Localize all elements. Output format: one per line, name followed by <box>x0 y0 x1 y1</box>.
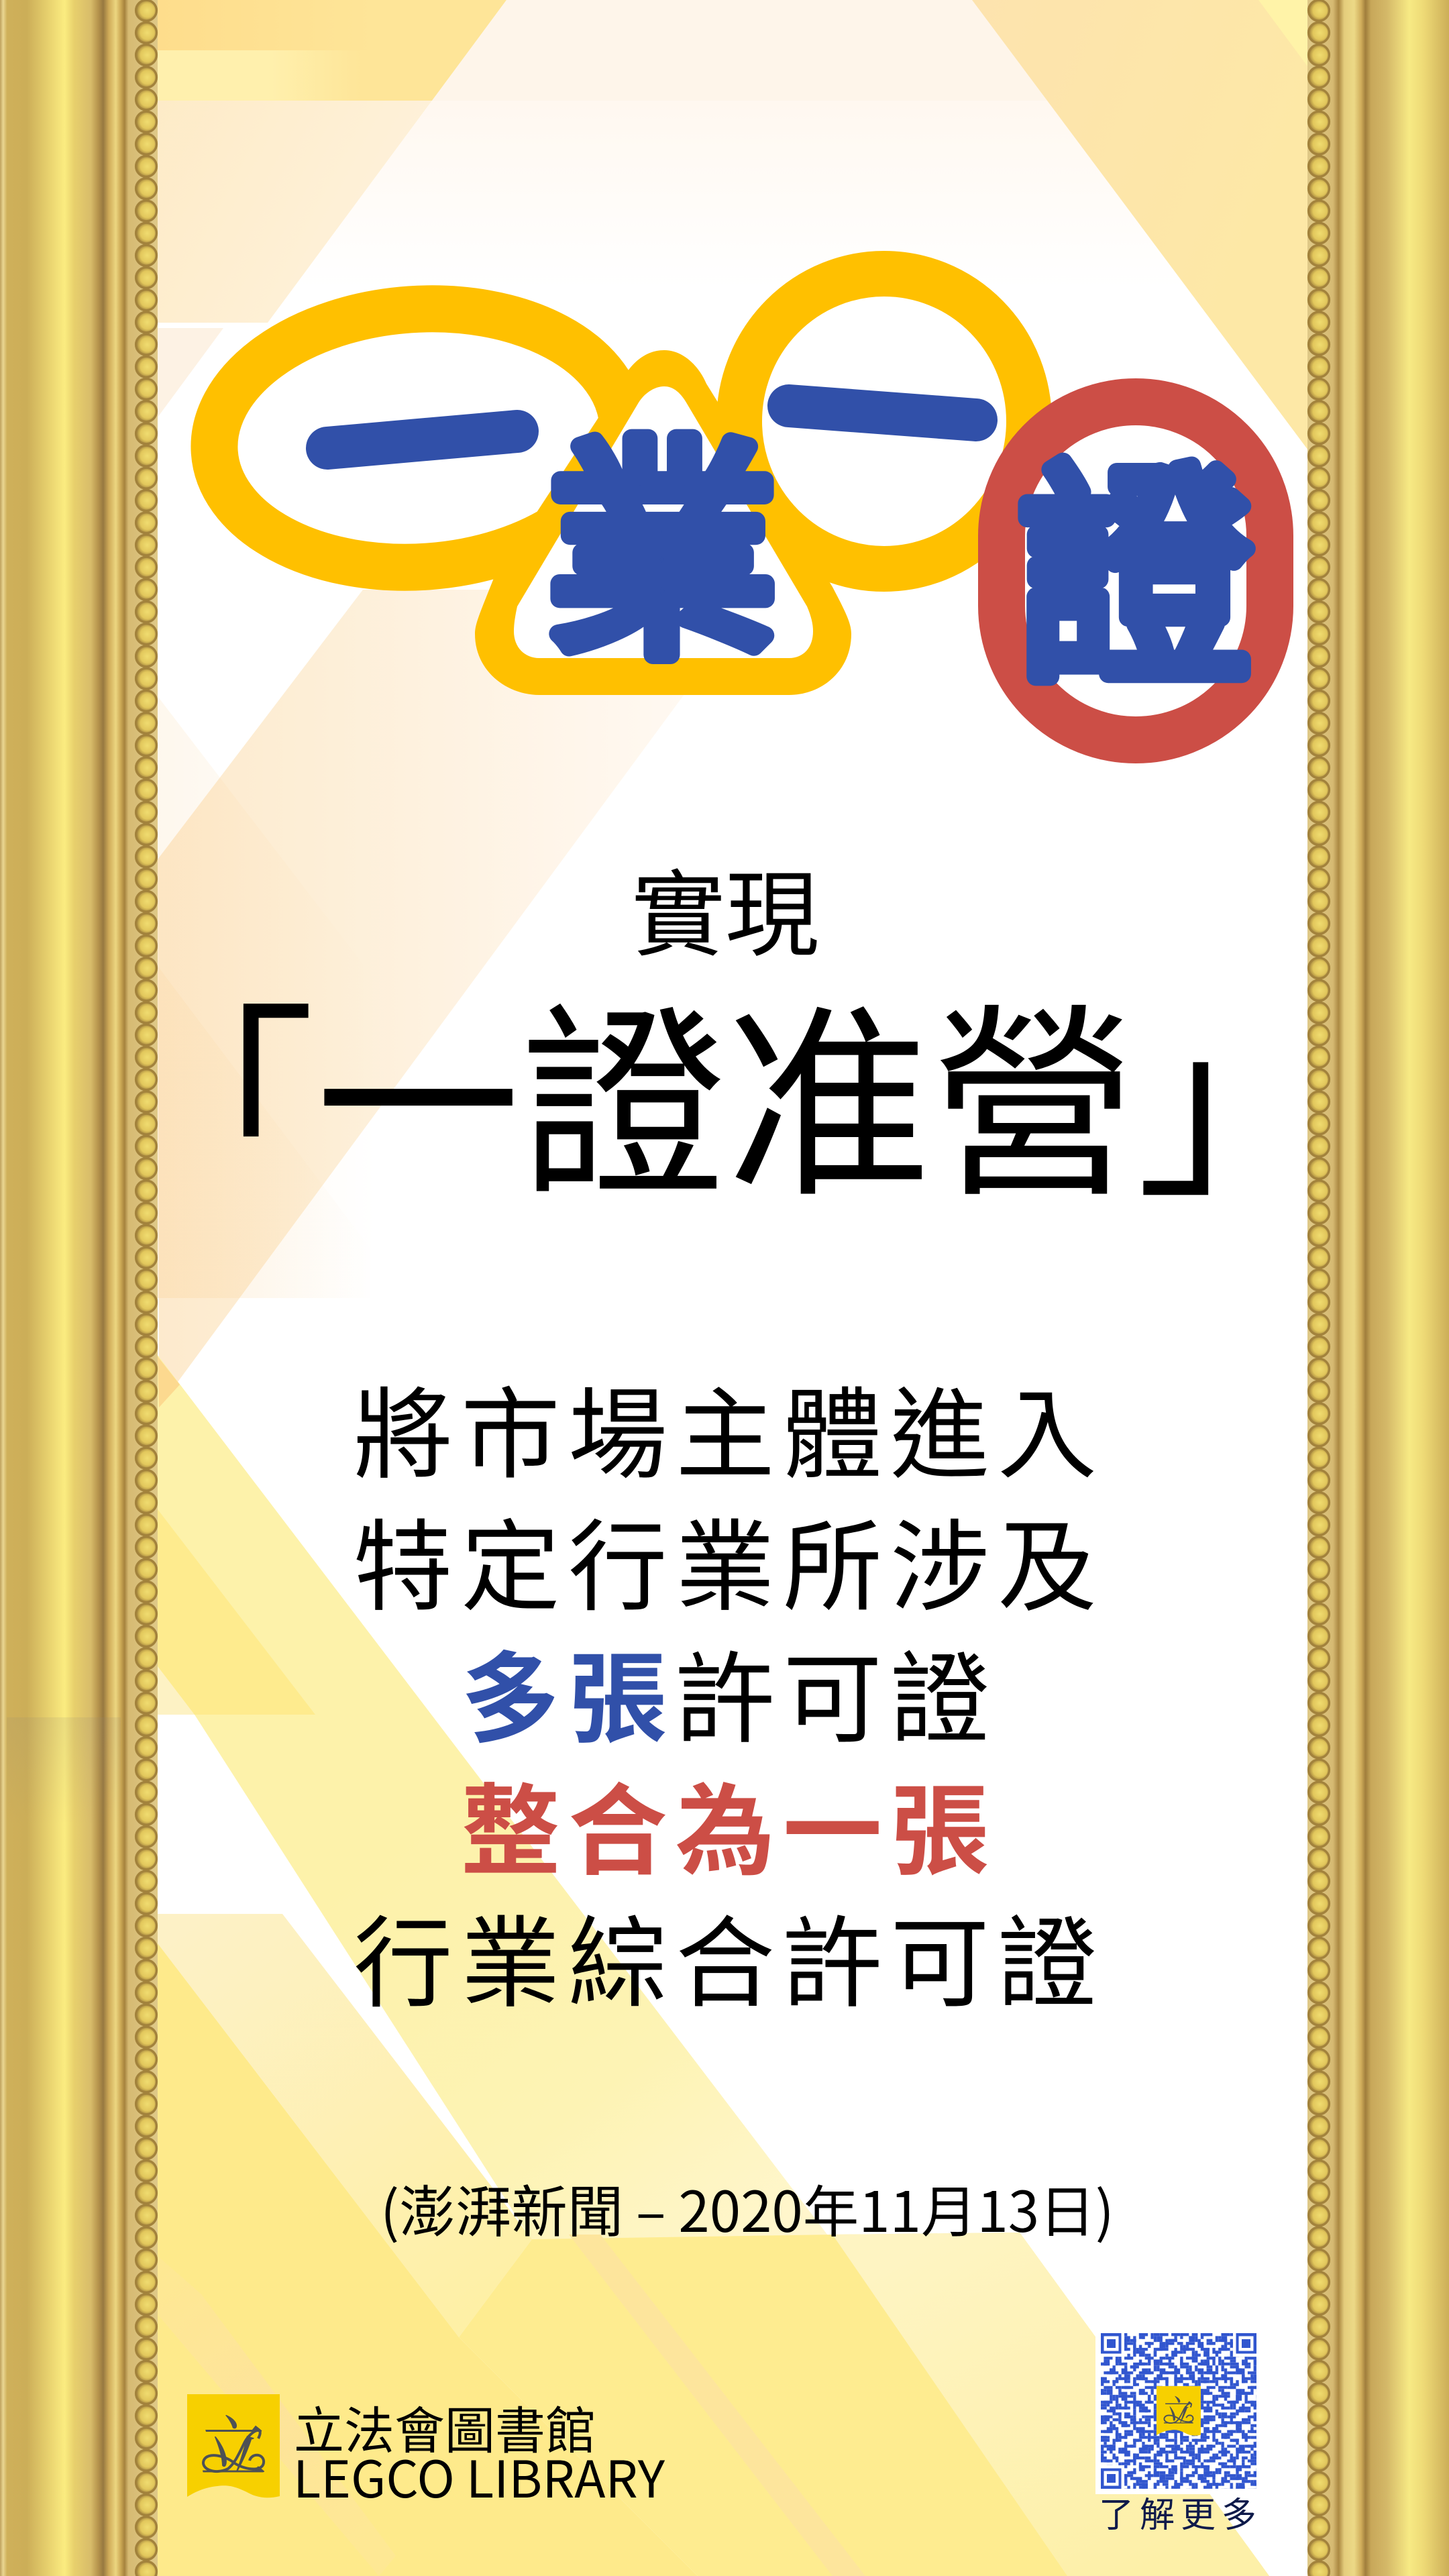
icon: bookmark emblem: 立 <box>200 2394 267 2491</box>
業 character: 業 <box>545 364 780 704</box>
icon: small emblem in QR <box>1157 2386 1201 2436</box>
icon: small emblem in QR: 立 <box>1163 2386 1195 2432</box>
line 3 with blue emphasis: 多張許可證 <box>461 1619 998 1763</box>
headline logo: 一業一證 <box>205 274 1270 740</box>
red rounded ring <box>1002 402 1270 740</box>
line 1: 將市場主體進入 <box>354 1354 1105 1499</box>
LegCo Library logo <box>187 2390 665 2512</box>
right gold picture frame <box>1307 0 1449 2576</box>
line 4 red emphasis: 整合為一張 <box>461 1751 998 1895</box>
main title: 一證准營: 「一證准營」 <box>110 940 1342 1237</box>
left gold picture frame <box>0 0 158 2576</box>
body text block <box>354 1354 1105 2027</box>
triangle ring <box>475 350 851 695</box>
heading: 實現: 實現 <box>631 840 819 975</box>
triangle inner <box>514 386 813 658</box>
right one stroke <box>789 406 976 420</box>
icon: bookmark emblem <box>187 2394 280 2498</box>
right bead column <box>1305 0 1332 2576</box>
left bead column <box>133 0 160 2576</box>
source citation: (澎湃新聞 – 2020年11月13日) <box>380 2167 1114 2249</box>
line 2: 特定行業所涉及 <box>354 1487 1105 1631</box>
left ellipse ring <box>205 295 632 581</box>
QR modules <box>1101 2333 1256 2489</box>
left one stroke <box>327 431 517 448</box>
library name Chinese: 立法會圖書館 <box>294 2390 596 2463</box>
library name English: LEGCO LIBRARY <box>293 2438 665 2512</box>
證 character: 證 <box>1018 388 1252 729</box>
line 5: 行業綜合許可證 <box>354 1883 1105 2027</box>
right circle ring <box>739 274 1029 569</box>
QR caption: 了解更多 <box>1099 2487 1263 2537</box>
QR code block <box>1095 2328 1263 2537</box>
